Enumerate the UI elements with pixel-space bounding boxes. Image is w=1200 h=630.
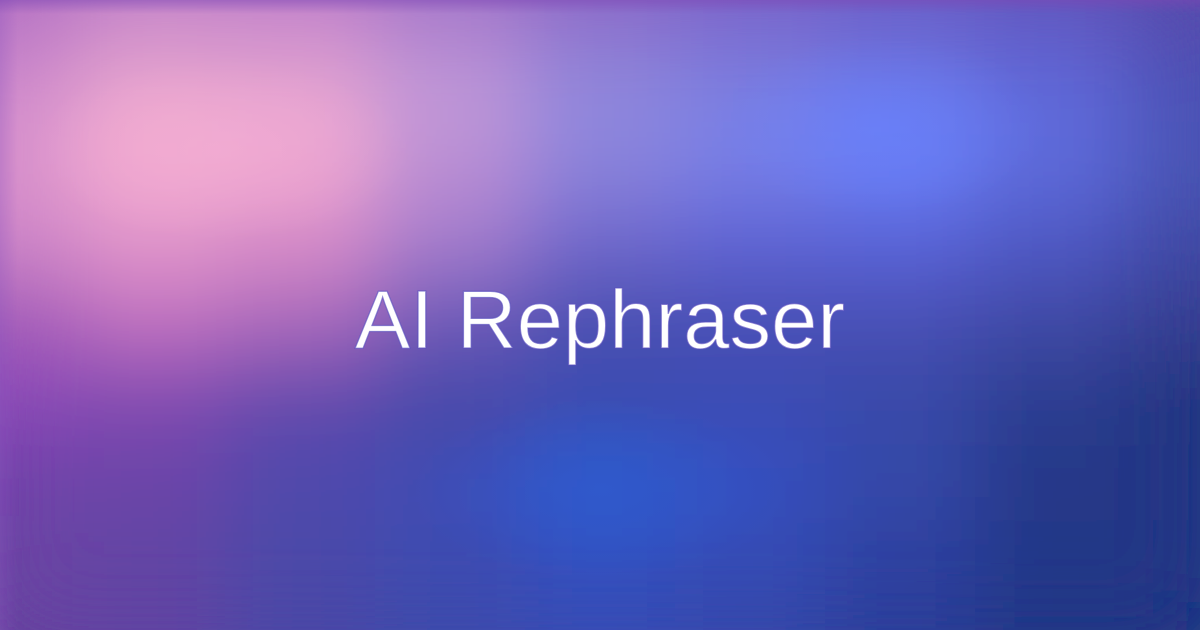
title: AI Rephraser bbox=[355, 273, 845, 366]
